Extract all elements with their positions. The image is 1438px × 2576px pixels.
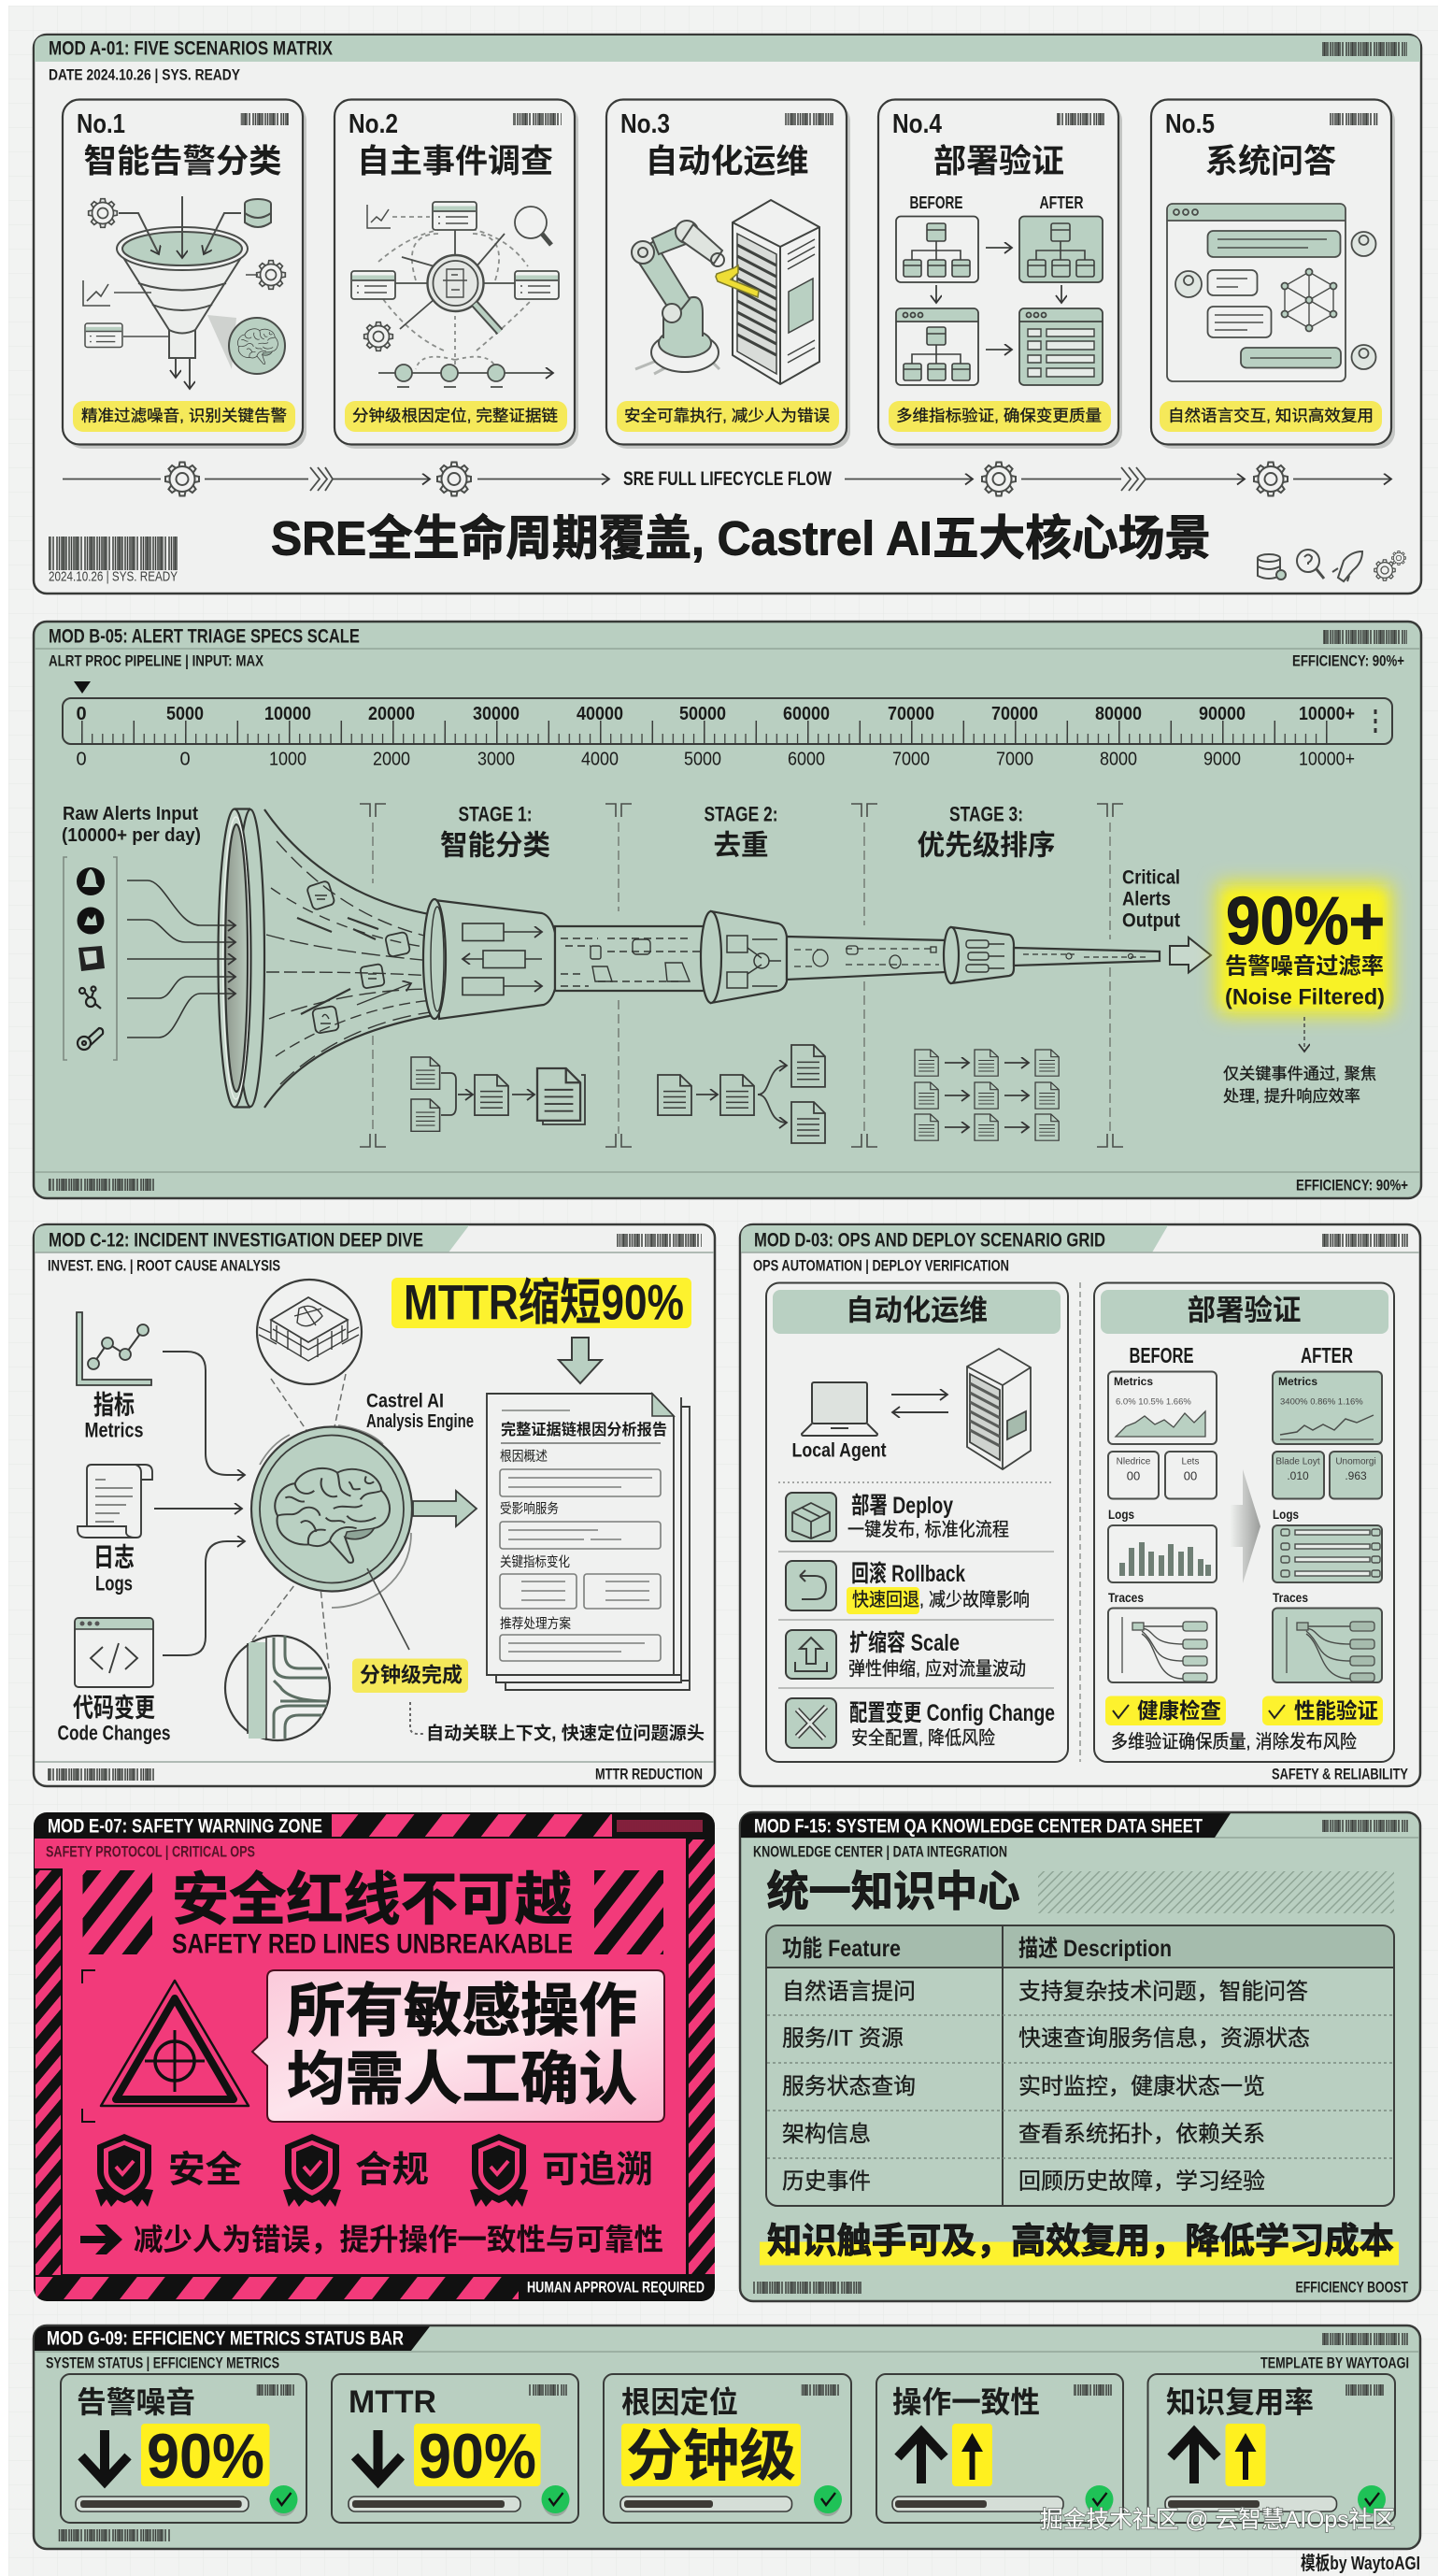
panel F header: MOD F-15: SYSTEM QA KNOWLEDGE CENTER DATA SHEET	[754, 1815, 1203, 1838]
output arrow	[413, 1491, 477, 1526]
card No.2 autonomous incident investigation: 分钟级根因定位, 完整证据链	[352, 408, 558, 424]
ruler scale: 2000	[373, 750, 410, 770]
server rack	[967, 1349, 1031, 1469]
feature table: 历史事件	[782, 2168, 871, 2195]
before dashboard: 00	[1127, 1469, 1140, 1482]
ruler scale: 9000	[1203, 750, 1241, 770]
panel G header	[35, 2326, 1408, 2351]
safety heading: 安全红线不可越	[172, 1868, 572, 1931]
feature table: 服务状态查询	[782, 2074, 916, 2099]
SRE lifecycle flow arrow	[63, 462, 1391, 495]
panel B footer	[49, 1176, 1408, 1195]
stage headings: STAGE 1:	[458, 802, 533, 826]
transition arrow	[1231, 1469, 1260, 1583]
health check badge: 健康检查	[1137, 1698, 1221, 1723]
row: rollback: 快速回退, 减少故障影响	[852, 1589, 1030, 1610]
ruler scale: 5000	[684, 750, 721, 770]
badge: compliant: 合规	[355, 2150, 429, 2191]
card No.1 intelligent alert triage	[63, 99, 306, 449]
yellow caption pill	[345, 401, 567, 432]
panel A date subtitle: DATE 2024.10.26 | SYS. READY	[49, 65, 241, 84]
ruler scale: 70000	[888, 704, 934, 724]
filter description: 处理, 提升响应效率	[1223, 1088, 1360, 1105]
critical alerts output label: Critical	[1122, 867, 1180, 888]
metrics input: Metrics	[84, 1419, 144, 1441]
card No.3 automated operations: 安全可靠执行, 减少人为错误	[624, 408, 830, 424]
ruler scale: 0	[179, 750, 191, 770]
before dashboard: Traces	[1108, 1590, 1144, 1605]
yellow caption pill	[617, 401, 839, 432]
ruler scale: 30000	[473, 704, 520, 724]
flared funnel pipeline	[127, 809, 1160, 1108]
raw alerts input label: (10000+ per day)	[62, 825, 201, 846]
card No.4 deployment verification: 多维指标验证, 确保变更质量	[896, 408, 1102, 424]
card: deployment verification	[1094, 1282, 1394, 1762]
card No.3 automated operations	[606, 99, 850, 449]
row: deploy: 部署 Deploy	[851, 1493, 953, 1519]
panel F: system QA knowledge center	[740, 1812, 1420, 2301]
alert source icons	[64, 857, 117, 1060]
ruler scale: 10000+	[1299, 750, 1355, 770]
panel G: efficiency metrics status bar	[34, 2326, 1420, 2549]
warning triangle icon	[82, 1970, 249, 2122]
feature table: 快速查询服务信息，资源状态	[1018, 2026, 1310, 2051]
local agent laptop: Local Agent	[792, 1439, 886, 1462]
highlighted 90 percent noise filtered: (Noise Filtered)	[1225, 985, 1385, 1009]
yellow caption pill	[73, 401, 295, 432]
zoom circle: server blade detail	[257, 1280, 362, 1453]
icon: magnifier investigation network	[367, 205, 553, 387]
card No.3 automated operations: No.3	[620, 109, 670, 139]
critical alerts output label	[1122, 867, 1180, 931]
small tool icons	[1258, 550, 1406, 581]
card No.1 intelligent alert triage: 精准过滤噪音, 识别关键告警	[81, 408, 287, 424]
panel G subtitle: SYSTEM STATUS | EFFICIENCY METRICS	[46, 2354, 279, 2372]
panel D: ops and deploy scenario grid	[740, 1224, 1420, 1786]
ruler scale: 40000	[577, 704, 623, 724]
card No.4 deployment verification: No.4	[892, 109, 942, 139]
stage headings: 智能分类	[440, 830, 550, 862]
ruler scale: 10000+	[1299, 704, 1355, 724]
badge: traceable: 可追溯	[542, 2150, 653, 2191]
ruler scale: 6000	[788, 750, 825, 770]
critical alerts output label: Output	[1122, 910, 1180, 931]
down arrow to report	[559, 1338, 602, 1383]
panel B header: MOD B-05: ALERT TRIAGE SPECS SCALE	[49, 626, 360, 647]
card No.5 system Q and A: No.5	[1165, 109, 1215, 139]
logs input	[78, 1465, 152, 1595]
context correlation note: 自动关联上下文, 快速定位问题源头	[426, 1722, 705, 1744]
zoom circle: circuit detail	[225, 1561, 330, 1740]
logs input: 日志	[93, 1542, 135, 1572]
card: automated operations: 自动化运维	[846, 1294, 988, 1327]
safety conclusion: 减少人为错误，提升操作一致性与可靠性	[134, 2223, 663, 2256]
root cause analysis report: 完整证据链根因分析报告	[501, 1420, 667, 1438]
human approval tag: HUMAN APPROVAL REQUIRED	[527, 2279, 705, 2296]
verification note: 多维验证确保质量, 消除发布风险	[1111, 1731, 1357, 1753]
panel G header: MOD G-09: EFFICIENCY METRICS STATUS BAR	[47, 2327, 404, 2350]
barcode with date stamp	[49, 537, 178, 585]
stage 1 collar	[423, 899, 1160, 1019]
panel C header: MOD C-12: INCIDENT INVESTIGATION DEEP DIVE	[49, 1230, 423, 1251]
card: deployment verification: BEFORE	[1129, 1343, 1194, 1367]
metric card: MTTR: 90%	[419, 2421, 536, 2492]
feature table: 支持复杂技术问题，智能问答	[1018, 1980, 1308, 2004]
panel E: safety warning zone	[34, 1812, 715, 2301]
stage 2 collar	[711, 911, 787, 1003]
output tip	[1014, 948, 1160, 966]
ruler scale: 4000	[581, 750, 619, 770]
stage 3 collar	[951, 927, 1014, 983]
ruler scale: 0	[76, 750, 87, 770]
stage 2 documents	[658, 1045, 825, 1143]
code changes input	[58, 1618, 170, 1744]
card No.2 autonomous incident investigation: No.2	[349, 109, 398, 139]
yellow caption pill	[1160, 401, 1382, 432]
panel D header	[741, 1225, 1419, 1252]
row: config change: 配置变更 Config Change	[849, 1700, 1055, 1726]
barcode with date stamp: 2024.10.26 | SYS. READY	[49, 568, 178, 585]
metric card: MTTR	[332, 2374, 578, 2523]
card No.1 intelligent alert triage: 智能告警分类	[84, 144, 282, 179]
efficiency tag top: EFFICIENCY: 90%+	[1292, 652, 1404, 669]
feature table: 自然语言提问	[782, 1980, 916, 2004]
panel A header bar	[35, 36, 1420, 62]
after dashboard: .010	[1287, 1469, 1309, 1482]
metric card: root cause: 分钟级	[626, 2425, 796, 2488]
human confirmation bubble: 所有敏感操作	[287, 1980, 637, 2043]
minute level badge	[352, 1658, 468, 1693]
code changes input: Code Changes	[58, 1722, 170, 1744]
raw alerts input label: Raw Alerts Input	[63, 804, 198, 824]
ruler scale: 60000	[783, 704, 830, 724]
metrics input: 指标	[93, 1391, 135, 1419]
output arrow	[1170, 937, 1211, 972]
badge: safe: 安全	[168, 2150, 242, 2191]
row: config change	[786, 1698, 1055, 1749]
funnel flow lines	[266, 841, 437, 1084]
metric card: operation consistency: 操作一致性	[892, 2385, 1040, 2419]
minute level badge: 分钟级完成	[360, 1664, 463, 1686]
stage 3 documents	[915, 1050, 1059, 1140]
feature table: 实时监控，健康状态一览	[1018, 2074, 1265, 2099]
ruler scale: 8000	[1100, 750, 1137, 770]
card: deployment verification: 部署验证	[1187, 1294, 1301, 1327]
after dashboard: Metrics	[1278, 1375, 1317, 1388]
panel B: alert triage specs scale	[34, 622, 1421, 1198]
panel A header bar: MOD A-01: FIVE SCENARIOS MATRIX	[49, 37, 333, 60]
panel B subtitle: ALRT PROC PIPELINE | INPUT: MAX	[49, 652, 264, 669]
MTTR callout: MTTR缩短90%	[404, 1275, 684, 1331]
after dashboard	[1273, 1372, 1382, 1682]
metric card: knowledge reuse: 知识复用率	[1166, 2385, 1314, 2419]
ruler scale: 90000	[1199, 704, 1246, 724]
root cause analysis report: 受影响服务	[500, 1501, 559, 1517]
panel F subtitle: KNOWLEDGE CENTER | DATA INTEGRATION	[753, 1843, 1007, 1860]
panel G footer barcode	[58, 2529, 170, 2541]
panel E subtitle: SAFETY PROTOCOL | CRITICAL OPS	[46, 1843, 255, 1860]
dashed callout arrow	[1303, 1017, 1305, 1052]
after dashboard: Traces	[1273, 1590, 1308, 1605]
code changes input: 代码变更	[73, 1694, 155, 1722]
root cause analysis report: 关键指标变化	[500, 1554, 570, 1570]
panel D header: MOD D-03: OPS AND DEPLOY SCENARIO GRID	[754, 1230, 1105, 1251]
feature table: 服务/IT 资源	[782, 2026, 904, 2051]
ruler scale: 50000	[679, 704, 726, 724]
engine label	[366, 1391, 474, 1432]
card: deployment verification: AFTER	[1301, 1343, 1353, 1367]
ruler scale: 7000	[892, 750, 930, 770]
watermark: 掘金技术社区 @ 云智慧AIOps社区	[1040, 2507, 1395, 2533]
panel C footer: MTTR REDUCTION	[595, 1765, 703, 1783]
metric card: root cause	[604, 2374, 851, 2523]
row: rollback: 回滚 Rollback	[851, 1561, 965, 1587]
stage headings: STAGE 2:	[705, 802, 777, 826]
knowledge center heading: 统一知识中心	[766, 1868, 1020, 1915]
stage headings: STAGE 3:	[949, 802, 1023, 826]
row: rollback	[786, 1561, 1030, 1614]
filter description	[1223, 1066, 1376, 1105]
feature table: 功能 Feature	[782, 1936, 901, 1962]
card No.4 deployment verification	[878, 99, 1122, 449]
metric card: operation consistency	[876, 2374, 1123, 2523]
ruler scale: 7000	[996, 750, 1033, 770]
metric card: alert noise	[61, 2374, 306, 2523]
main title: SRE全生命周期覆盖, Castrel AI五大核心场景	[271, 512, 1211, 565]
engine label: Castrel AI	[366, 1391, 444, 1411]
before dashboard	[1108, 1372, 1217, 1682]
card No.1 intelligent alert triage: No.1	[77, 109, 125, 139]
after dashboard: Blade Loyt	[1275, 1456, 1320, 1467]
feature table: 架构信息	[782, 2122, 871, 2147]
performance verify badge	[1262, 1696, 1383, 1725]
feature table: 回顾历史故障，学习经验	[1018, 2168, 1265, 2195]
panel C: incident investigation deep dive	[34, 1224, 715, 1786]
safety heading: SAFETY RED LINES UNBREAKABLE	[172, 1929, 573, 1959]
engine label: Analysis Engine	[366, 1411, 474, 1432]
human confirmation bubble	[252, 1970, 664, 2122]
before dashboard: Lets	[1182, 1456, 1199, 1467]
filter description: 仅关键事件通过, 聚焦	[1223, 1066, 1376, 1082]
input arrows	[127, 880, 235, 1038]
panel C footer	[35, 1762, 714, 1783]
ruler scale: 1000	[269, 750, 306, 770]
safety heading	[172, 1868, 573, 1959]
hazard stripe blocks	[82, 1870, 663, 1954]
ruler scale: 3000	[477, 750, 515, 770]
root cause analysis report: 根因概述	[500, 1449, 548, 1465]
human confirmation bubble: 均需人工确认	[287, 2047, 637, 2112]
input arrows to engine	[154, 1352, 245, 1655]
stage dividers	[360, 804, 1123, 1147]
before and after diagram	[896, 193, 1103, 385]
SRE lifecycle flow arrow: SRE FULL LIFECYCLE FLOW	[623, 468, 832, 490]
ruler scale: 70000	[991, 704, 1038, 724]
row: deploy: 一键发布, 标准化流程	[847, 1519, 1009, 1540]
card No.5 system Q and A: 系统问答	[1205, 144, 1336, 179]
raw alerts input label	[62, 804, 201, 846]
icon: yellow wrench	[716, 265, 759, 297]
card No.2 autonomous incident investigation	[335, 99, 578, 449]
panel A: five scenarios matrix	[34, 35, 1421, 594]
feature table: 查看系统拓扑，依赖关系	[1018, 2122, 1265, 2147]
metric card: root cause: 根因定位	[621, 2385, 738, 2419]
card No.3 automated operations: 自动化运维	[645, 144, 809, 179]
before dashboard: 00	[1184, 1469, 1197, 1482]
card No.5 system Q and A: 自然语言交互, 知识高效复用	[1168, 408, 1374, 424]
card No.4 deployment verification: 部署验证	[933, 144, 1064, 179]
metric card: knowledge reuse	[1147, 2374, 1395, 2523]
panel B footer: EFFICIENCY: 90%+	[1296, 1176, 1408, 1195]
context correlation note	[410, 1702, 705, 1744]
ruler scale: 10000	[264, 704, 311, 724]
panel D subtitle: OPS AUTOMATION | DEPLOY VERIFICATION	[753, 1256, 1009, 1275]
row: scale	[786, 1629, 1026, 1680]
badge: compliant	[283, 2134, 429, 2207]
badge: safe	[95, 2134, 242, 2207]
stage headings: 去重	[714, 830, 768, 862]
panel C subtitle: INVEST. ENG. | ROOT CAUSE ANALYSIS	[48, 1256, 280, 1275]
row: scale: 弹性伸缩, 应对流量波动	[848, 1658, 1026, 1680]
stage 1 documents	[411, 1057, 585, 1131]
analysis engine brain	[251, 1425, 412, 1650]
metric card: alert noise: 告警噪音	[77, 2385, 195, 2419]
icon: server rack	[733, 200, 819, 384]
after dashboard: Logs	[1273, 1507, 1299, 1522]
ruler scale: 5000	[166, 704, 204, 724]
stage headings	[440, 802, 1056, 862]
icon: robot arm	[632, 221, 724, 374]
metric card: MTTR: MTTR	[349, 2384, 436, 2420]
highlighted 90 percent noise filtered: 告警噪音过滤率	[1225, 953, 1384, 980]
root cause analysis report: 推荐处理方案	[500, 1615, 571, 1632]
card No.5 system Q and A	[1151, 99, 1395, 449]
after dashboard: 3400% 0.86% 1.16%	[1280, 1396, 1363, 1408]
row: config change: 安全配置, 降低风险	[851, 1727, 995, 1749]
metric card: alert noise: 90%	[147, 2421, 264, 2492]
row: deploy	[786, 1493, 1009, 1541]
icon: chat window with knowledge graph	[1167, 204, 1375, 381]
panel F footer	[753, 2279, 1408, 2296]
critical alerts output label: Alerts	[1122, 888, 1171, 910]
before dashboard: Nledrice	[1117, 1456, 1151, 1467]
feature table	[766, 1925, 1394, 2206]
after dashboard: Unomorgi	[1335, 1456, 1376, 1467]
root cause analysis report	[487, 1394, 690, 1690]
after dashboard: .963	[1345, 1469, 1367, 1482]
panel C header	[35, 1225, 714, 1252]
yellow caption pill	[889, 401, 1111, 432]
knowledge conclusion highlight: 知识触手可及，高效复用，降低学习成本	[767, 2223, 1394, 2262]
icon: funnel with inputs	[83, 196, 285, 389]
before dashboard: Metrics	[1114, 1375, 1153, 1388]
row: scale: 扩缩容 Scale	[849, 1629, 960, 1656]
badge: traceable	[470, 2134, 653, 2207]
performance verify badge: 性能验证	[1294, 1698, 1378, 1723]
ruler scale: 0	[76, 704, 87, 724]
before dashboard: 6.0% 10.5% 1.66%	[1116, 1396, 1191, 1408]
logs input: Logs	[95, 1572, 133, 1595]
local agent laptop	[792, 1382, 948, 1462]
metrics input	[77, 1312, 151, 1441]
panel E header	[48, 1815, 703, 1838]
health check badge	[1105, 1696, 1226, 1725]
ruler scale: 20000	[368, 704, 415, 724]
ruler scale	[63, 681, 1392, 770]
before and after diagram: BEFORE	[910, 193, 962, 212]
panel E header: MOD E-07: SAFETY WARNING ZONE	[48, 1815, 322, 1838]
feature table: 描述 Description	[1018, 1936, 1172, 1962]
before and after diagram: AFTER	[1039, 193, 1084, 212]
ruler scale: 80000	[1095, 704, 1142, 724]
highlighted 90 percent noise filtered: 90%+	[1226, 884, 1385, 959]
card: automated operations	[766, 1282, 1068, 1762]
before dashboard: Logs	[1108, 1507, 1134, 1522]
card No.2 autonomous incident investigation: 自主事件调查	[357, 144, 553, 179]
pipe 3	[787, 937, 947, 980]
highlighted 90 percent noise filtered	[1218, 884, 1390, 1013]
stage headings: 优先级排序	[918, 830, 1056, 862]
